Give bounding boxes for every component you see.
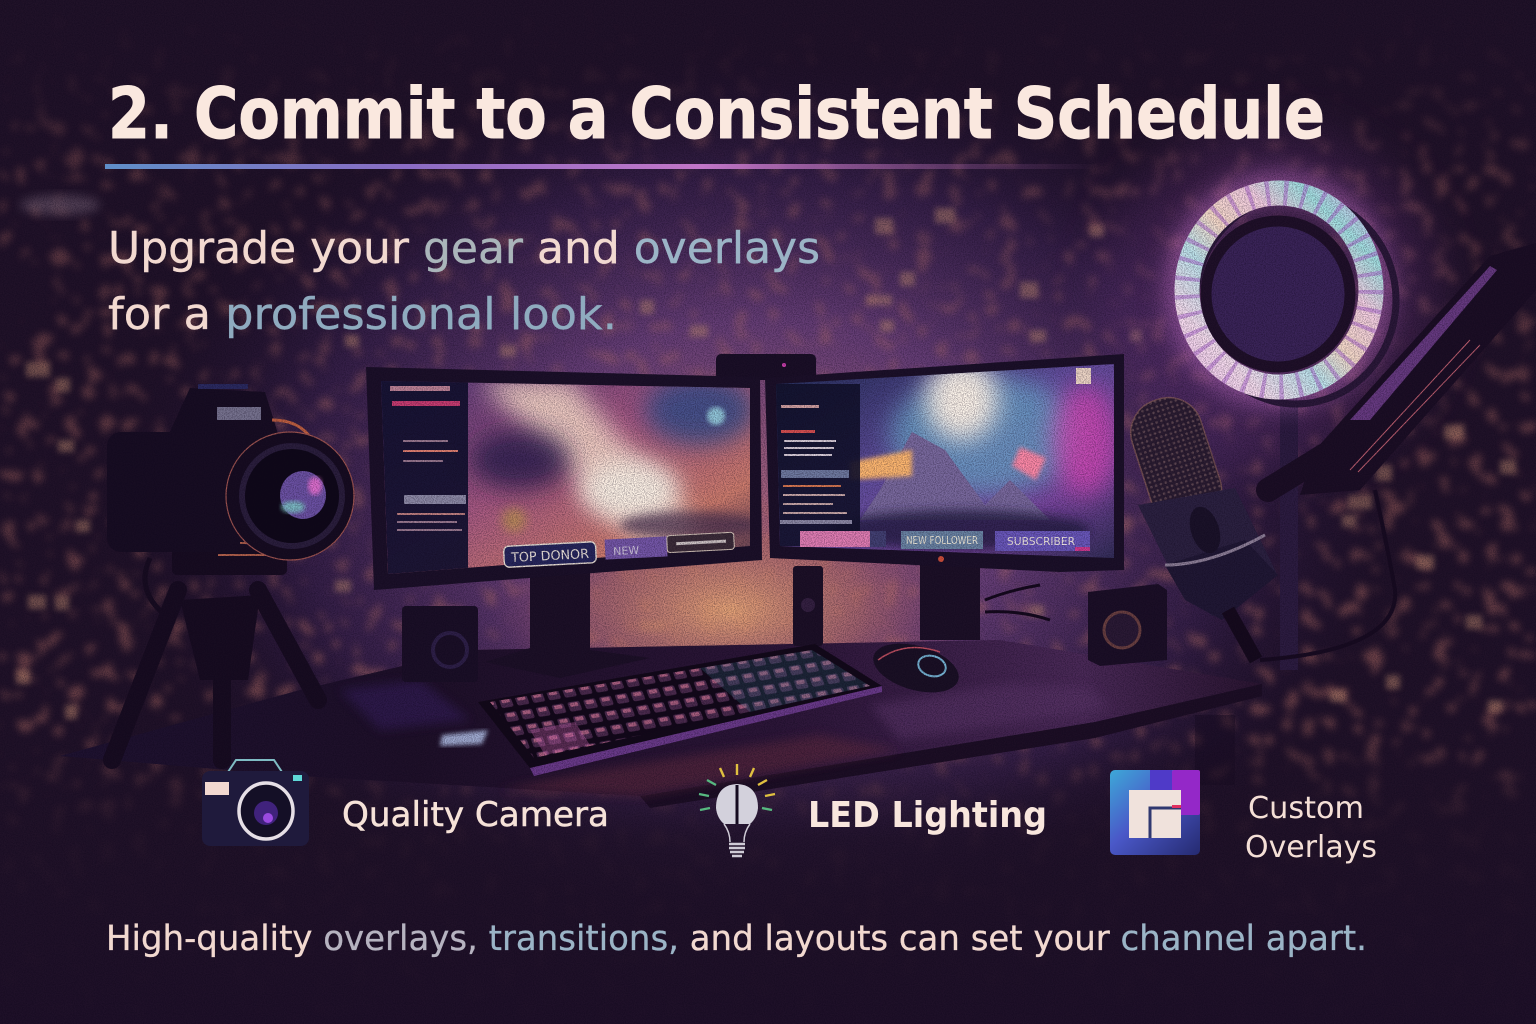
right monitor [765,354,1124,572]
feature: quality camera [202,760,609,846]
label: custom overlays: Overlays [1245,830,1377,865]
label: quality camera: Quality Camera [342,795,609,835]
background: dark bokeh wall [0,56,1536,864]
feature: custom overlays [1110,770,1377,865]
overlay label: top donor: TOP DONOR [510,547,589,566]
label: custom overlays: Custom [1248,791,1364,826]
desk [60,640,1262,808]
icon: overlays [1110,770,1200,855]
keyboard [478,644,882,776]
monitor stands [485,560,1050,678]
overlay label: news ticker: NEW [613,544,640,558]
caption: High-quality overlays, transitions, and layouts can set your channel apart. [106,919,1367,959]
ring light [1179,186,1396,670]
camera on tripod [107,384,354,760]
overlay bar: pink [800,531,886,547]
overlay label: top donor [503,542,596,567]
icon: camera [202,760,309,846]
speakers [402,566,1167,682]
icon: light bulb [699,764,775,856]
overlay label: subscriber: SUBSCRIBER [1007,535,1075,548]
label: custom overlays [1245,791,1377,865]
subheading: Upgrade your gear and overlays [108,223,820,274]
microphone on boom arm [1122,243,1536,660]
left monitor [366,367,762,590]
title: 2. Commit to a Consistent Schedule [108,73,1325,155]
overlay label: news ticker [605,532,734,560]
overlay label: subscriber [995,531,1090,551]
mouse [868,635,964,701]
feature: LED lighting [699,764,1047,856]
title underline [105,164,1100,169]
label: LED lighting: LED Lighting [808,795,1047,836]
subheading [108,223,820,340]
overlay label: new follower [901,531,983,549]
overlay label: new follower: NEW FOLLOWER [906,534,978,547]
webcam on monitors [716,354,816,380]
subheading: for a professional look. [108,289,617,340]
